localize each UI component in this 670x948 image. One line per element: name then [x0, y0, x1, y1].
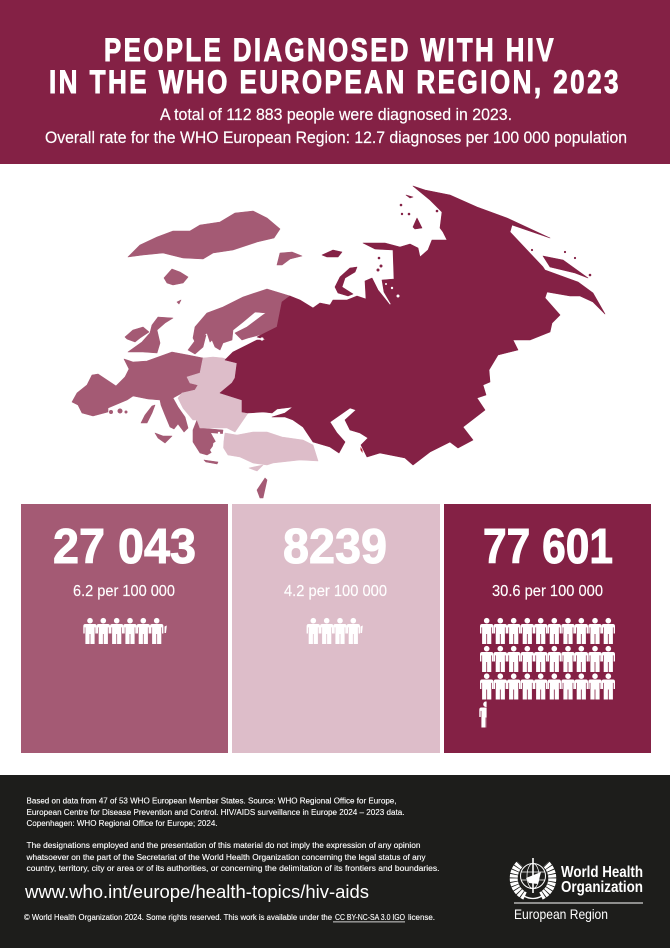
rate: central: 4.2 per 100 000	[284, 583, 387, 600]
WHO logo	[514, 858, 643, 922]
subtitle: A total of 112 883 people were diagnosed in 2023.	[160, 105, 512, 124]
copyright line: license.	[408, 912, 435, 922]
map: western subregion	[72, 211, 302, 498]
map of the WHO European Region	[72, 186, 605, 498]
rate: eastern: 30.6 per 100 000	[492, 583, 603, 600]
disclaimer: The designations employed and the presentation of this material do not imply the expression of any opinion	[26, 840, 421, 850]
map: eastern subregion	[220, 186, 605, 465]
source note: Copenhagen: WHO Regional Office for Europe; 2024.	[26, 818, 218, 828]
WHO wordmark	[561, 864, 643, 896]
icon grid: 30.5 people	[479, 618, 615, 728]
rate: western: 6.2 per 100 000	[73, 583, 175, 600]
disclaimer: whatsoever on the part of the Secretariat of the World Health Organization concerning the legal status of any	[26, 852, 426, 862]
title: PEOPLE DIAGNOSED WITH HIV	[104, 32, 556, 68]
European Region label: European Region	[514, 906, 608, 922]
icon row: 4 people	[307, 618, 363, 644]
number: eastern: 77 601	[483, 520, 613, 574]
map: small white inlets	[210, 271, 400, 460]
disclaimer: country, territory, city or area or of its authorities, or concerning the delimitation of its frontiers and boundaries.	[26, 863, 440, 873]
icon row: 6 people	[83, 618, 167, 644]
map: central subregion	[178, 357, 318, 471]
number: central: 8239	[283, 520, 387, 574]
header band	[0, 0, 670, 164]
panel: eastern subregion	[444, 504, 651, 753]
WHO wordmark: Organization	[561, 879, 643, 896]
panel: western subregion	[21, 504, 228, 753]
number: western: 27 043	[53, 520, 196, 574]
source note	[26, 796, 404, 828]
subtitle	[45, 105, 627, 147]
copyright line: © World Health Organization 2024. Some rights reserved. This work is available under the	[24, 912, 332, 922]
source note: European Centre for Disease Prevention and Control. HIV/AIDS surveillance in Europe 2024 – 2023 data.	[26, 807, 404, 817]
icon: WHO emblem	[514, 858, 552, 898]
footer band	[0, 775, 670, 948]
panel: central subregion	[232, 504, 440, 753]
disclaimer	[26, 840, 439, 873]
copyright line: CC BY-NC-SA 3.0 IGO	[335, 912, 405, 922]
website URL: www.who.int/europe/health-topics/hiv-aids	[24, 882, 369, 902]
title	[49, 32, 621, 100]
source note: Based on data from 47 of 53 WHO European Member States. Source: WHO Regional Office for Europe,	[26, 796, 396, 806]
map: Israel accent	[360, 447, 362, 453]
WHO wordmark: World Health	[561, 864, 643, 881]
subtitle: Overall rate for the WHO European Region: 12.7 diagnoses per 100 000 population	[45, 128, 627, 147]
